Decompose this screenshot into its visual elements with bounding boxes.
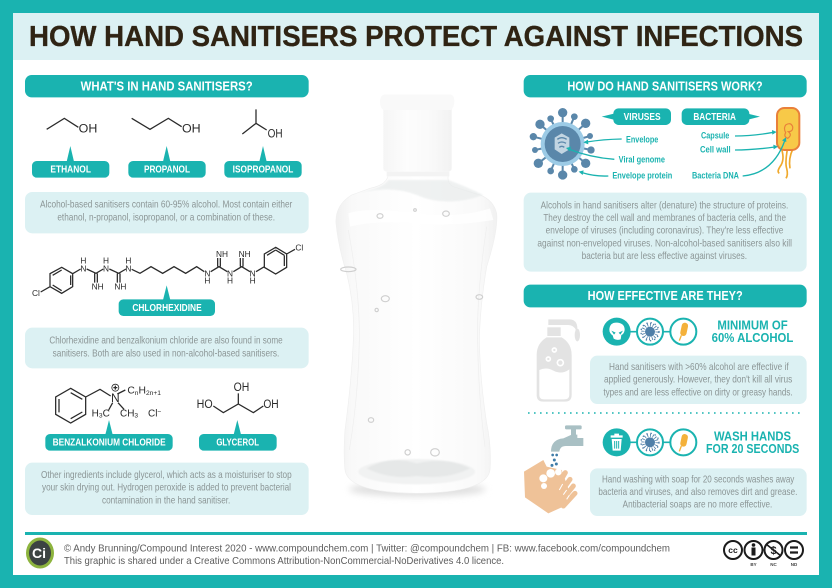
molecule: chlorhexidine: N [250, 268, 256, 278]
molecule: chlorhexidine: N [204, 268, 210, 278]
text block: how sanitisers work: They destroy the cell wall and membranes of bacteria cells, and the [543, 213, 786, 224]
heading: how effective are they: HOW EFFECTIVE ARE THEY? [588, 288, 743, 303]
text block: 60% alcohol [590, 356, 807, 404]
molecule: isopropanol [242, 109, 283, 140]
icons: creative commons licence: NC [770, 562, 777, 567]
molecule: benzalkonium chloride: C [127, 386, 135, 397]
heading: how effective are they [524, 285, 807, 307]
panel: what's in hand sanitisers top [25, 75, 309, 233]
callout: virus labels: Envelope [626, 134, 658, 144]
label: ethanol [32, 146, 109, 178]
molecule: chlorhexidine: N [227, 268, 233, 278]
molecule: propanol: OH [182, 122, 201, 136]
molecule: benzalkonium chloride: CH [120, 408, 134, 419]
label: bacteria: BACTERIA [693, 112, 736, 123]
molecule: chlorhexidine: H [204, 275, 210, 285]
molecule: benzalkonium chloride: 2n+1 [146, 390, 161, 397]
callout: bacteria labels: Bacteria DNA [692, 171, 739, 181]
title band [13, 13, 819, 60]
panel: wash hands for 20 seconds [524, 425, 807, 516]
logo: compound interest [26, 538, 54, 568]
text block: hand washing: bacteria and viruses, and also removes dirt and grease. [598, 487, 797, 498]
title: HOW HAND SANITISERS PROTECT AGAINST INFECTIONS [29, 21, 803, 53]
molecule: chlorhexidine: N [103, 263, 109, 273]
heading: minimum of 60% alcohol [712, 317, 793, 345]
label: isopropanol [224, 146, 302, 178]
molecule: chlorhexidine: H [80, 256, 86, 266]
molecule: chlorhexidine [32, 243, 303, 298]
molecule: chlorhexidine: H [250, 275, 256, 285]
icons: skull, virus, bacteria [603, 318, 696, 346]
text block: other ingredients [25, 463, 309, 515]
callout: virus labels [566, 134, 673, 181]
molecule: chlorhexidine: H [103, 256, 109, 266]
text block: hand washing: Antibacterial soaps are no more effective. [623, 500, 772, 511]
molecule: benzalkonium chloride [56, 384, 161, 423]
credits: © Andy Brunning/Compound Interest 2020 - www.compoundchem.com | Twitter: @compoundchem | FB: www.facebook.com/compoundchem [64, 542, 670, 554]
text block: 60% alcohol: applied generously. However, they don't kill all virus [604, 375, 792, 386]
molecule: benzalkonium chloride: H [139, 386, 146, 397]
label: bacteria [682, 108, 760, 125]
text block: chlorhexidine note: sanitisers. Both are also used in non-alcohol-based sanitisers. [53, 348, 279, 359]
label: benzalkonium chloride [45, 420, 173, 451]
molecule: benzalkonium chloride: − [157, 409, 161, 416]
heading: wash hands for 20 seconds: WASH HANDS [714, 429, 791, 444]
heading: minimum of 60% alcohol: 60% ALCOHOL [712, 330, 793, 345]
icons: creative commons licence: $ [770, 545, 777, 557]
molecule: glycerol [197, 380, 279, 413]
text block: how sanitisers work: Alcohols in hand sanitisers alter (denature) the structure of proteins. [541, 200, 788, 211]
heading: what's in hand sanitisers [25, 75, 309, 97]
panel: other ingredients [25, 380, 309, 515]
heading: how do hand sanitisers work [524, 75, 807, 97]
callout: virus labels: Viral genome [619, 154, 665, 164]
text block: 60% alcohol: Hand sanitisers with >60% alcohol are effective if [609, 362, 789, 373]
text block: 60% alcohol: types and are less effective on dirty or greasy hands. [603, 387, 793, 398]
callout: virus labels: Envelope protein [612, 171, 673, 181]
molecule: propanol [132, 118, 201, 136]
panel: how do hand sanitisers work [524, 75, 807, 181]
icons: creative commons licence: BY [750, 562, 757, 567]
text block: hand washing: Hand washing with soap for 20 seconds washes away [602, 474, 794, 485]
label: isopropanol: ISOPROPANOL [233, 164, 293, 175]
label: chlorhexidine: CHLORHEXIDINE [132, 303, 202, 314]
label: ethanol: ETHANOL [50, 164, 91, 175]
label: glycerol: GLYCEROL [216, 437, 259, 448]
text block: how sanitisers work: against non-enveloped viruses. Non-alcohol-based sanitisers also kill [537, 238, 792, 249]
molecule: glycerol: OH [263, 397, 279, 411]
text block: other ingredients: contamination in the hand sanitiser. [102, 495, 230, 506]
icon: bacterium [777, 108, 799, 178]
label: viruses [602, 108, 671, 125]
icons: creative commons licence: ND [791, 562, 798, 567]
molecule: benzalkonium chloride: C [103, 408, 110, 419]
label: chlorhexidine [119, 285, 215, 316]
heading: minimum of 60% alcohol: MINIMUM OF [717, 317, 788, 332]
panel: minimum of 60% alcohol [537, 317, 807, 404]
molecule: glycerol: HO [197, 397, 213, 411]
text block: alcohol content: Alcohol-based sanitisers contain 60-95% alcohol. Most contain either [40, 200, 293, 211]
molecule: benzalkonium chloride: H [92, 408, 99, 419]
molecule: isopropanol: OH [268, 126, 283, 140]
molecule: chlorhexidine: N [80, 263, 86, 273]
molecule: benzalkonium chloride: Cl [148, 408, 157, 419]
text block: alcohol content [25, 192, 309, 233]
panel: chlorhexidine [25, 243, 309, 368]
label: benzalkonium chloride: BENZALKONIUM CHLORIDE [53, 437, 166, 448]
text block: other ingredients: your skin drying out. Hydrogen peroxide is added to prevent bacterial [42, 483, 291, 494]
text block: how sanitisers work [524, 193, 807, 272]
molecule: benzalkonium chloride: 3 [99, 412, 103, 419]
molecule: chlorhexidine: NH [114, 282, 126, 292]
molecule: chlorhexidine: H [227, 275, 233, 285]
icon: virus [530, 108, 595, 180]
label: glycerol [199, 420, 277, 451]
molecule: benzalkonium chloride: 3 [134, 412, 138, 419]
text block: how sanitisers work: bacteria but are less effective against viruses. [582, 251, 747, 262]
heading: wash hands for 20 seconds [706, 429, 800, 456]
credits [64, 542, 670, 567]
heading: what's in hand sanitisers: WHAT'S IN HAND SANITISERS? [81, 79, 253, 94]
icons: creative commons licence [724, 541, 803, 567]
molecule: chlorhexidine: NH [239, 249, 251, 259]
text block: how sanitisers work: envelope of viruses (including coronavirus). They're less effective [546, 226, 783, 237]
logo: compound interest: Ci [32, 545, 46, 561]
icon: hands [524, 460, 575, 513]
footer rule [25, 532, 807, 535]
text block: alcohol content: ethanol, n-propanol, isopropanol, or a combination of these. [57, 212, 275, 223]
callout: bacteria labels [692, 130, 786, 181]
bottle illustration [336, 94, 497, 497]
molecule: glycerol: OH [234, 380, 249, 394]
heading: how do hand sanitisers work: HOW DO HAND SANITISERS WORK? [567, 79, 763, 94]
text block: chlorhexidine note [25, 328, 309, 368]
molecule: chlorhexidine: Cl [295, 243, 303, 253]
callout: bacteria labels: Capsule [701, 130, 729, 140]
icons: trash, virus, bacteria [603, 428, 696, 456]
label: propanol [128, 146, 206, 178]
molecule: benzalkonium chloride: n [135, 390, 139, 397]
molecule: chlorhexidine: N [125, 263, 131, 273]
icons: creative commons licence: cc [728, 545, 738, 555]
label: propanol: PROPANOL [144, 164, 190, 175]
molecule: benzalkonium chloride: N [111, 391, 120, 405]
molecule: ethanol [47, 118, 97, 136]
icon: pump bottle [537, 319, 580, 402]
text block: hand washing [590, 468, 807, 516]
label: viruses: VIRUSES [624, 112, 661, 123]
text block: chlorhexidine note: Chlorhexidine and benzalkonium chloride are also found in some [49, 336, 283, 347]
text block: other ingredients: Other ingredients include glycerol, which acts as a moisturiser to stop [41, 470, 292, 481]
molecule: ethanol: OH [79, 122, 97, 136]
callout: bacteria labels: Cell wall [700, 145, 731, 155]
icon: tap [550, 425, 583, 467]
molecule: chlorhexidine: NH [92, 282, 104, 292]
molecule: chlorhexidine: H [125, 256, 131, 266]
molecule: chlorhexidine: Cl [32, 288, 40, 298]
molecule: chlorhexidine: NH [216, 249, 228, 259]
credits: This graphic is shared under a Creative Commons Attribution-NonCommercial-NoDerivatives 4.0 licence. [64, 555, 504, 567]
heading: wash hands for 20 seconds: FOR 20 SECONDS [706, 441, 800, 456]
